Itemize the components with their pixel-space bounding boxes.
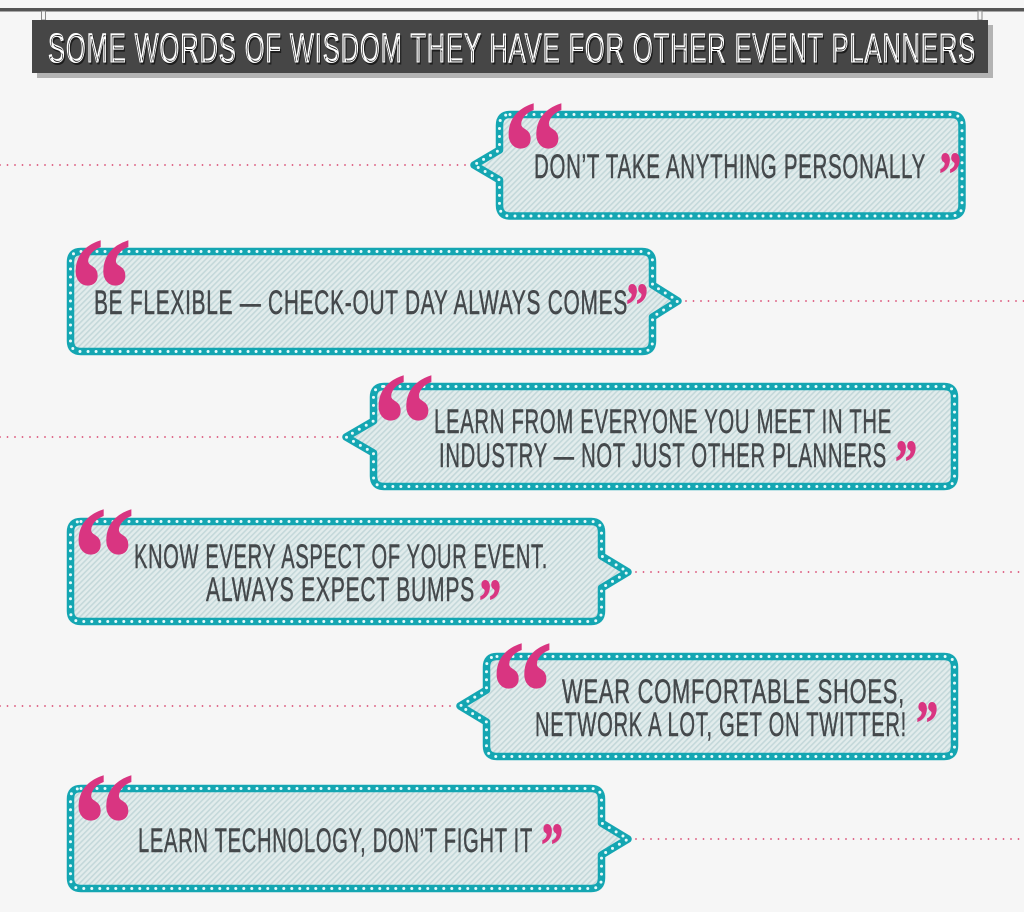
quote 5: speech bubble: ”	[916, 689, 938, 758]
quote 6: speech bubble: “	[72, 742, 136, 907]
quote 4: speech bubble: ALWAYS EXPECT BUMPS	[206, 571, 475, 609]
quote 6: speech bubble: LEARN TECHNOLOGY, DON’T FIGHT IT	[138, 822, 533, 860]
quote 3: speech bubble	[0, 342, 954, 507]
quote 5: speech bubble	[0, 610, 954, 775]
quote 6: speech bubble: ”	[541, 811, 563, 880]
quote 2: speech bubble	[70, 207, 1024, 372]
quote 1: speech bubble: “	[502, 70, 566, 235]
quote 4: speech bubble: ”	[479, 567, 501, 636]
quote 1: speech bubble: ”	[939, 140, 961, 209]
quote 4: speech bubble: “	[72, 476, 136, 641]
quote 2: speech bubble: “	[70, 207, 133, 372]
quote 2: speech bubble: ”	[626, 271, 648, 340]
quote 4: speech bubble: KNOW EVERY ASPECT OF YOUR EVENT.	[134, 538, 548, 576]
quote 4: speech bubble	[70, 476, 1024, 641]
title banner	[0, 8, 1024, 78]
quote 3: speech bubble: ”	[895, 428, 917, 497]
quote 1: speech bubble	[0, 70, 962, 235]
quote 2: speech bubble: BE FLEXIBLE — CHECK-OUT DAY ALWAYS COMES	[94, 284, 628, 322]
quote 6: speech bubble	[70, 742, 1024, 907]
quote 5: speech bubble: “	[490, 610, 554, 775]
quote 3: speech bubble: “	[372, 342, 436, 507]
